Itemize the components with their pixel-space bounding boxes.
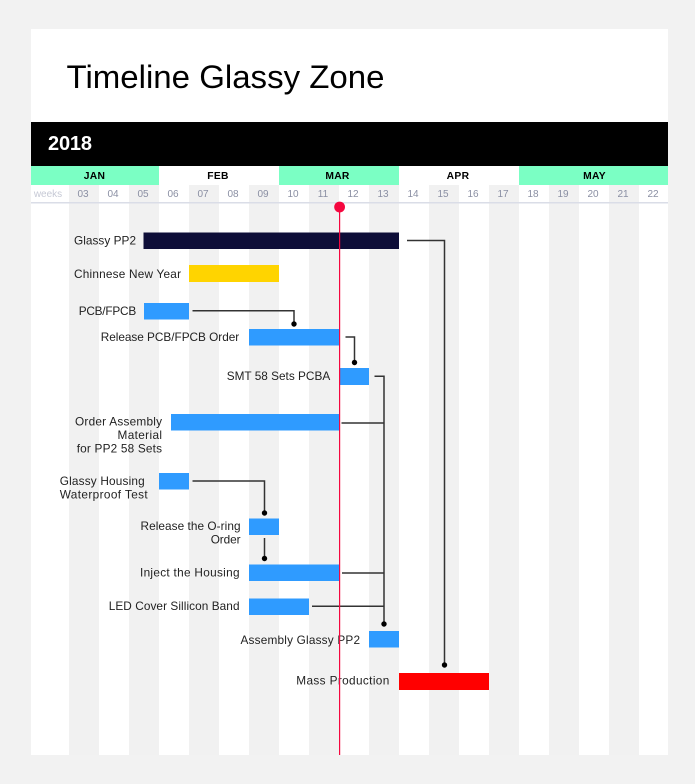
arrow: PCB/FPCB to Release order bbox=[192, 311, 297, 327]
task: Chinnese New Year bbox=[74, 265, 279, 282]
week numbers row: 05 bbox=[137, 189, 149, 200]
month header row: APR bbox=[447, 171, 470, 182]
week numbers row: 03 bbox=[77, 189, 89, 200]
week numbers row: 08 bbox=[227, 189, 239, 200]
task: Chinnese New Year: Chinnese New Year bbox=[74, 267, 181, 281]
arrow: Release order to SMT bbox=[346, 337, 357, 365]
task: Glassy PP2: Glassy PP2 bbox=[74, 234, 136, 248]
task: PCB/FPCB bbox=[79, 303, 189, 320]
task: Glassy Housing Waterproof Test: Glassy Housing bbox=[60, 474, 145, 488]
arrow: Inject to Assembly line bbox=[342, 572, 384, 574]
week numbers row: 22 bbox=[647, 189, 659, 200]
arrow: LED Cover to Assembly line bbox=[312, 605, 384, 607]
week numbers row: 14 bbox=[407, 189, 419, 200]
arrow: Order Assembly Material to Assembly line bbox=[342, 422, 384, 424]
task: PCB/FPCB: PCB/FPCB bbox=[79, 304, 136, 318]
week numbers row: 21 bbox=[617, 189, 629, 200]
task: Assembly Glassy PP2 bbox=[240, 631, 399, 648]
task: Order Assembly Material for PP2 58 Sets: for PP2 58 Sets bbox=[77, 442, 162, 456]
task: Order Assembly Material for PP2 58 Sets: Order Assembly bbox=[75, 414, 162, 428]
task: SMT 58 Sets PCBA: SMT 58 Sets PCBA bbox=[227, 369, 330, 383]
task: LED Cover Sillicon Band: LED Cover Sillicon Band bbox=[109, 599, 240, 613]
week numbers row: 18 bbox=[527, 189, 539, 200]
week numbers row: 20 bbox=[587, 189, 599, 200]
week numbers row: 07 bbox=[197, 189, 209, 200]
task: Order Assembly Material for PP2 58 Sets bbox=[75, 414, 339, 456]
task: Release the O-ring Order bbox=[140, 518, 279, 547]
month header row: FEB bbox=[207, 171, 229, 182]
week numbers row: 10 bbox=[287, 189, 299, 200]
task: Glassy PP2 bbox=[74, 232, 399, 249]
week numbers row: 17 bbox=[497, 189, 509, 200]
week numbers row: 16 bbox=[467, 189, 479, 200]
arrow: O-ring to Inject bbox=[262, 538, 267, 561]
month header row: MAY bbox=[583, 171, 606, 182]
week numbers row: 13 bbox=[377, 189, 389, 200]
year band bbox=[31, 122, 668, 166]
week numbers row: weeks bbox=[33, 189, 62, 200]
month header row: MAR bbox=[325, 171, 350, 182]
week numbers row: 19 bbox=[557, 189, 569, 200]
arrow: Housing test to O-ring bbox=[192, 481, 267, 516]
task: Release PCB/FPCB Order bbox=[101, 329, 339, 346]
week numbers row: 11 bbox=[318, 189, 329, 200]
task: Mass Production: Mass Production bbox=[296, 674, 389, 688]
task: Inject the Housing bbox=[140, 564, 339, 581]
arrow: SMT to Assembly bbox=[374, 376, 387, 627]
week numbers row bbox=[31, 189, 668, 204]
week numbers row: 12 bbox=[347, 189, 359, 200]
task: Release PCB/FPCB Order: Release PCB/FPCB Order bbox=[101, 330, 239, 344]
task: Glassy Housing Waterproof Test bbox=[60, 473, 189, 502]
task: Order Assembly Material for PP2 58 Sets: Material bbox=[118, 428, 162, 442]
task: LED Cover Sillicon Band bbox=[109, 598, 309, 615]
week column stripes bbox=[69, 185, 639, 755]
task: Release the O-ring Order: Release the O-ring bbox=[140, 519, 240, 533]
task: SMT 58 Sets PCBA bbox=[227, 368, 369, 385]
week numbers row: 06 bbox=[167, 189, 179, 200]
week numbers row: 09 bbox=[257, 189, 269, 200]
title: Timeline Glassy Zone bbox=[66, 59, 384, 95]
arrow: Glassy PP2 to Mass Production bbox=[407, 240, 447, 668]
task: Assembly Glassy PP2: Assembly Glassy PP2 bbox=[240, 633, 360, 647]
task: Release the O-ring Order: Order bbox=[211, 533, 241, 547]
year band: 2018 bbox=[48, 133, 92, 155]
week numbers row: 04 bbox=[107, 189, 119, 200]
week numbers row: 15 bbox=[437, 189, 449, 200]
task: Mass Production bbox=[296, 673, 489, 690]
current date marker bbox=[334, 202, 345, 755]
month header row bbox=[31, 166, 668, 185]
task: Glassy Housing Waterproof Test: Waterproof Test bbox=[60, 488, 148, 502]
task: Inject the Housing: Inject the Housing bbox=[140, 566, 240, 580]
month header row: JAN bbox=[84, 171, 105, 182]
